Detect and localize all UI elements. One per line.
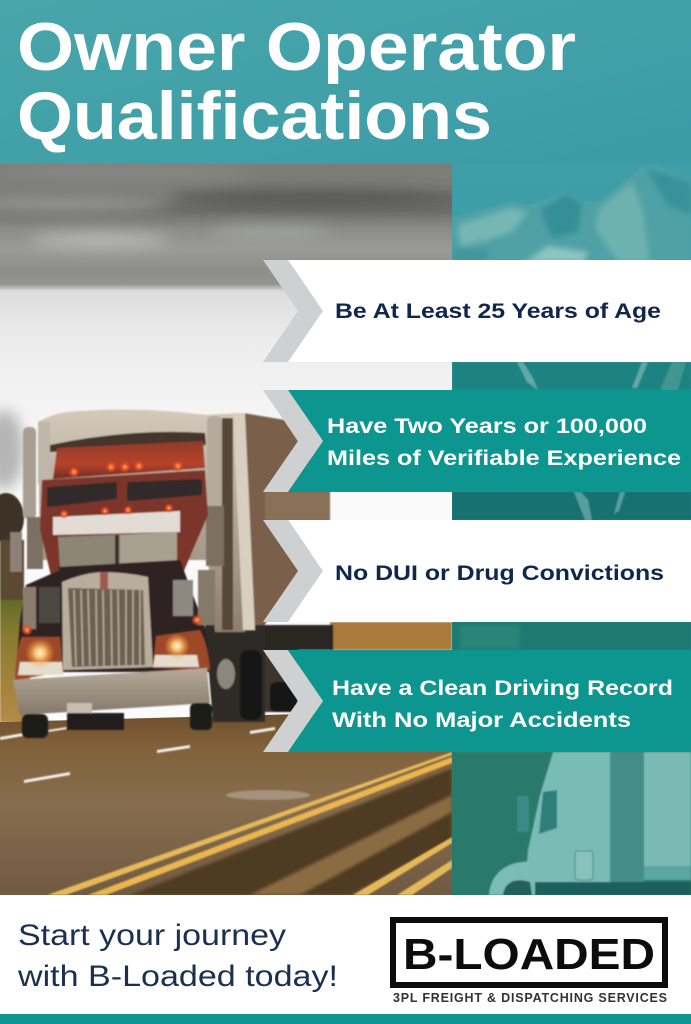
- road markings: [0, 727, 452, 895]
- header background: [0, 0, 691, 164]
- sun visor: [53, 511, 180, 535]
- windshield: [57, 533, 146, 568]
- front wheels: [22, 714, 48, 738]
- fenders: [15, 637, 63, 680]
- cab windows: [47, 482, 117, 507]
- roadside trees and field: [0, 493, 452, 722]
- semi truck: [10, 410, 333, 738]
- faded truck: [489, 752, 691, 895]
- call to action: with B-Loaded today!: [17, 960, 338, 993]
- call to action: Start your journey: [18, 919, 286, 952]
- left panel: truck on highway photo: [0, 164, 470, 895]
- roof fairing: [53, 441, 205, 479]
- requirement 2: experience: [263, 390, 691, 492]
- teal gaps between bands: [452, 362, 691, 649]
- requirement 2: experience: Have Two Years or 100,000: [327, 414, 647, 438]
- hood emblem: [100, 572, 108, 589]
- footer accent bar: [0, 1014, 691, 1024]
- lower cab sides: [16, 560, 210, 672]
- trailer side: [243, 413, 330, 640]
- logo: B-Loaded: B-LOADED: [403, 930, 655, 979]
- requirement 4: driving record: Have a Clean Driving Record: [332, 676, 673, 700]
- requirement 2: experience: Miles of Verifiable Experience: [327, 446, 681, 470]
- requirement 3: convictions: [263, 520, 691, 622]
- requirement 3: convictions: No DUI or Drug Convictions: [335, 561, 664, 585]
- road: [0, 710, 452, 895]
- logo: B-Loaded: 3PL FREIGHT & DISPATCHING SERVICES: [393, 991, 667, 1005]
- right panel: teal tinted mountain and truck photo: [452, 164, 691, 895]
- title: Qualifications: [17, 78, 492, 154]
- chrome grille: [62, 572, 153, 670]
- lower lights: [18, 662, 63, 675]
- footer background: [0, 895, 691, 1014]
- requirement 1: age: Be At Least 25 Years of Age: [335, 299, 661, 323]
- requirement 1: age: [263, 260, 691, 362]
- bumper: [13, 668, 210, 715]
- distant cloud: [0, 410, 24, 490]
- logo: B-Loaded: [393, 920, 667, 1005]
- call to action: [17, 919, 338, 993]
- title: Owner Operator: [17, 9, 576, 85]
- stormy sky: [0, 164, 452, 433]
- requirement 4: driving record: With No Major Accidents: [332, 708, 631, 732]
- glowing lights: [21, 460, 203, 668]
- mountain range: [452, 165, 691, 262]
- chassis and rear wheels: [264, 624, 334, 650]
- requirement 4: driving record: [263, 650, 691, 752]
- trailer front frame: [38, 410, 245, 632]
- exhaust stacks: [23, 427, 36, 519]
- cab: [40, 470, 208, 580]
- mirror brackets: [10, 532, 22, 572]
- title: [17, 9, 576, 154]
